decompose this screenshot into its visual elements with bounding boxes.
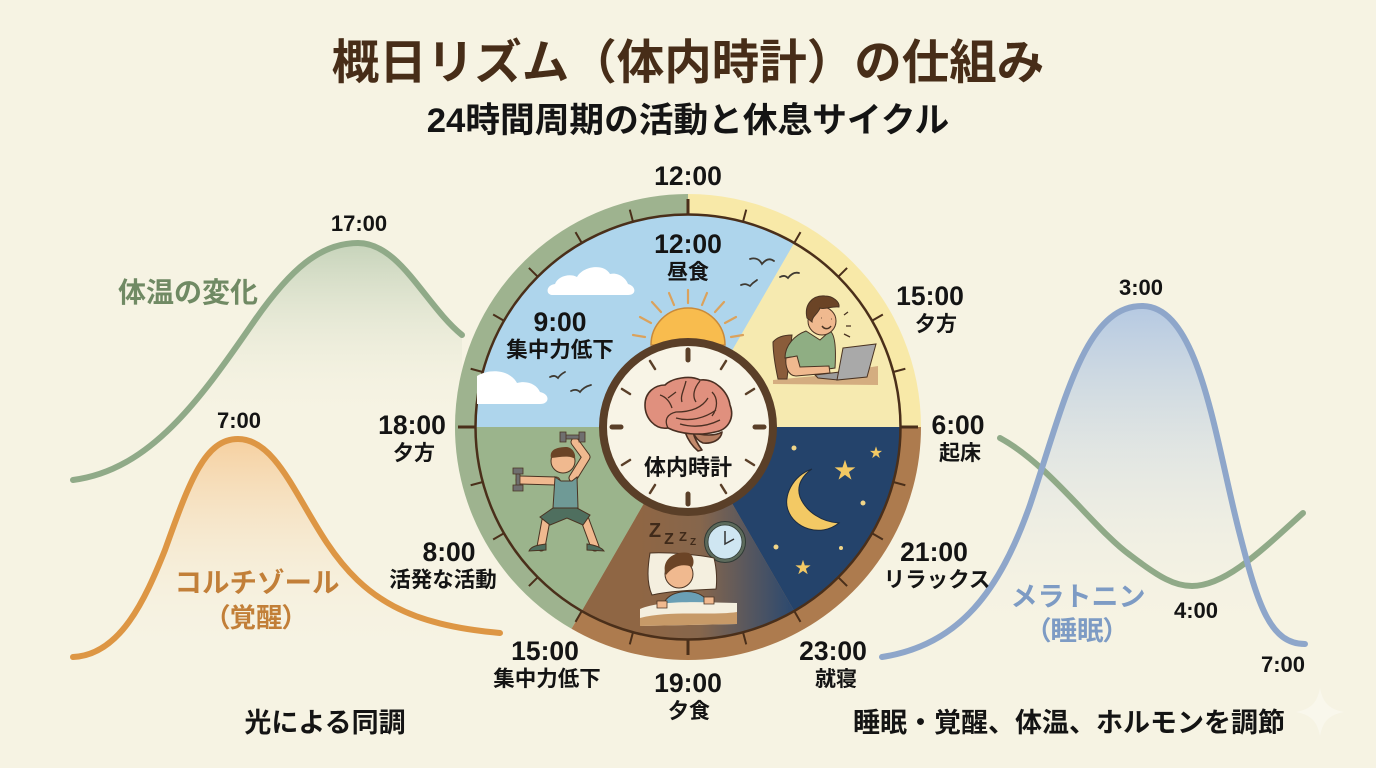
sector: afternoon: [688, 243, 900, 427]
face: [821, 318, 832, 329]
label: 21:00: 21:00: [900, 537, 968, 567]
label: active: 活発な活動: [389, 568, 497, 592]
motion lines: [844, 312, 851, 337]
label: 15:00 left: 15:00: [511, 636, 579, 666]
dumbbell side: [513, 468, 523, 491]
label: 23:00: 23:00: [799, 636, 867, 666]
icon: moon and stars: ★: [869, 445, 883, 460]
tank top: [553, 477, 578, 508]
laptop base: [815, 372, 840, 380]
laptop screen: [837, 344, 876, 380]
label: 8:00: 8:00: [422, 537, 476, 567]
time labels inside dial: [506, 229, 722, 362]
label: 9:00: 9:00: [533, 307, 587, 337]
label: bedtime: 就寝: [815, 667, 857, 691]
outer ring: green: [455, 194, 688, 629]
icon: moon and stars: ★: [795, 560, 811, 577]
label: 19:00: 19:00: [654, 668, 722, 698]
icon: person at laptop: [773, 296, 878, 385]
clock face: [603, 342, 773, 512]
label: arousal: （覚醒）: [216, 603, 296, 633]
label: 18:00: 18:00: [378, 410, 446, 440]
label: 7:00: 7:00: [217, 408, 261, 433]
head: [808, 307, 836, 335]
sector: morning sky: [476, 215, 794, 427]
clock dial: [455, 194, 921, 660]
label: 3:00: 3:00: [1119, 275, 1163, 300]
icon: brain: [645, 378, 732, 451]
blanket: [640, 602, 737, 626]
caption: regulation: 睡眠・覚醒、体温、ホルモンを調節: [853, 708, 1285, 738]
icon: sleeping person: [640, 520, 746, 626]
hands: [657, 597, 714, 608]
shorts: [540, 508, 590, 525]
label: body clock: 体内時計: [644, 455, 732, 480]
chart: cortisol curve: [73, 408, 500, 657]
label: 4:00: 4:00: [1174, 598, 1218, 623]
label: 17:00: 17:00: [331, 211, 387, 236]
label: 7:00 right: 7:00: [1261, 652, 1305, 677]
limbs skin: [520, 442, 595, 547]
time labels around dial: [378, 161, 990, 723]
subtitle: 24時間周期の活動と休息サイクル: [427, 101, 949, 140]
head: [665, 560, 693, 588]
icon: moon and stars: [774, 445, 883, 577]
label: low focus: 集中力低下: [506, 338, 614, 362]
label: low focus lower: 集中力低下: [493, 667, 601, 691]
label: noon: 12:00: [654, 229, 722, 259]
icon: lower cloud: [477, 371, 548, 404]
label: top 12:00: 12:00: [654, 161, 722, 191]
arm: [786, 356, 830, 376]
icon: sun: [633, 290, 743, 345]
chart: body temperature curve: [73, 211, 462, 480]
label: evening right: 夕方: [915, 313, 957, 336]
snore letters: Z: [649, 520, 661, 542]
hair: [665, 552, 694, 575]
alarm clock: [704, 522, 746, 562]
hour marks: [612, 350, 764, 504]
limbs outline: [520, 442, 595, 547]
icon: sparkle: [1296, 688, 1344, 736]
shoes: [529, 544, 604, 551]
label: 6:00: 6:00: [931, 410, 985, 440]
dumbbell top: [560, 432, 585, 442]
snore letters: Z: [664, 531, 674, 548]
icon: birds: [550, 258, 799, 392]
snore letters: Z: [679, 529, 687, 544]
chart: melatonin and temperature curves: [882, 275, 1305, 677]
label: melatonin: メラトニン: [1010, 582, 1146, 612]
label: evening left: 夕方: [393, 442, 435, 465]
icon: moon and stars: ★: [834, 458, 856, 483]
ring ticks: [458, 199, 918, 655]
label: sleep: （睡眠）: [1037, 616, 1117, 646]
snore letters: [649, 520, 696, 548]
icon: person exercising: [513, 432, 604, 551]
sector: activity: [476, 427, 688, 611]
label: 15:00 right: 15:00: [896, 281, 964, 311]
snore letters: Z: [690, 537, 696, 548]
shoulders: [665, 592, 706, 606]
head: [551, 449, 575, 473]
label: lunch: 昼食: [667, 261, 709, 284]
label: body temperature: 体温の変化: [118, 277, 258, 308]
title: 概日リズム（体内時計）の仕組み: [332, 37, 1044, 90]
ring divider: [476, 214, 900, 640]
icon: upper cloud: [548, 267, 634, 295]
label: relax: リラックス: [884, 568, 990, 592]
chair: [773, 335, 792, 379]
hair: [551, 447, 575, 459]
caption: light synchronization: 光による同調: [244, 708, 406, 738]
sector: sleep: [582, 427, 794, 639]
desk: [773, 366, 878, 385]
blanket lower: [640, 612, 737, 626]
outer ring: yellow: [688, 194, 921, 427]
pillow: [648, 553, 717, 595]
label: cortisol: コルチゾール: [174, 567, 340, 598]
label: dinner: 夕食: [668, 700, 710, 723]
hair: [806, 296, 839, 322]
shirt: [785, 331, 835, 374]
label: wake up: 起床: [939, 442, 981, 465]
outer ring: brown: [572, 427, 921, 660]
sector: night: [688, 427, 900, 611]
